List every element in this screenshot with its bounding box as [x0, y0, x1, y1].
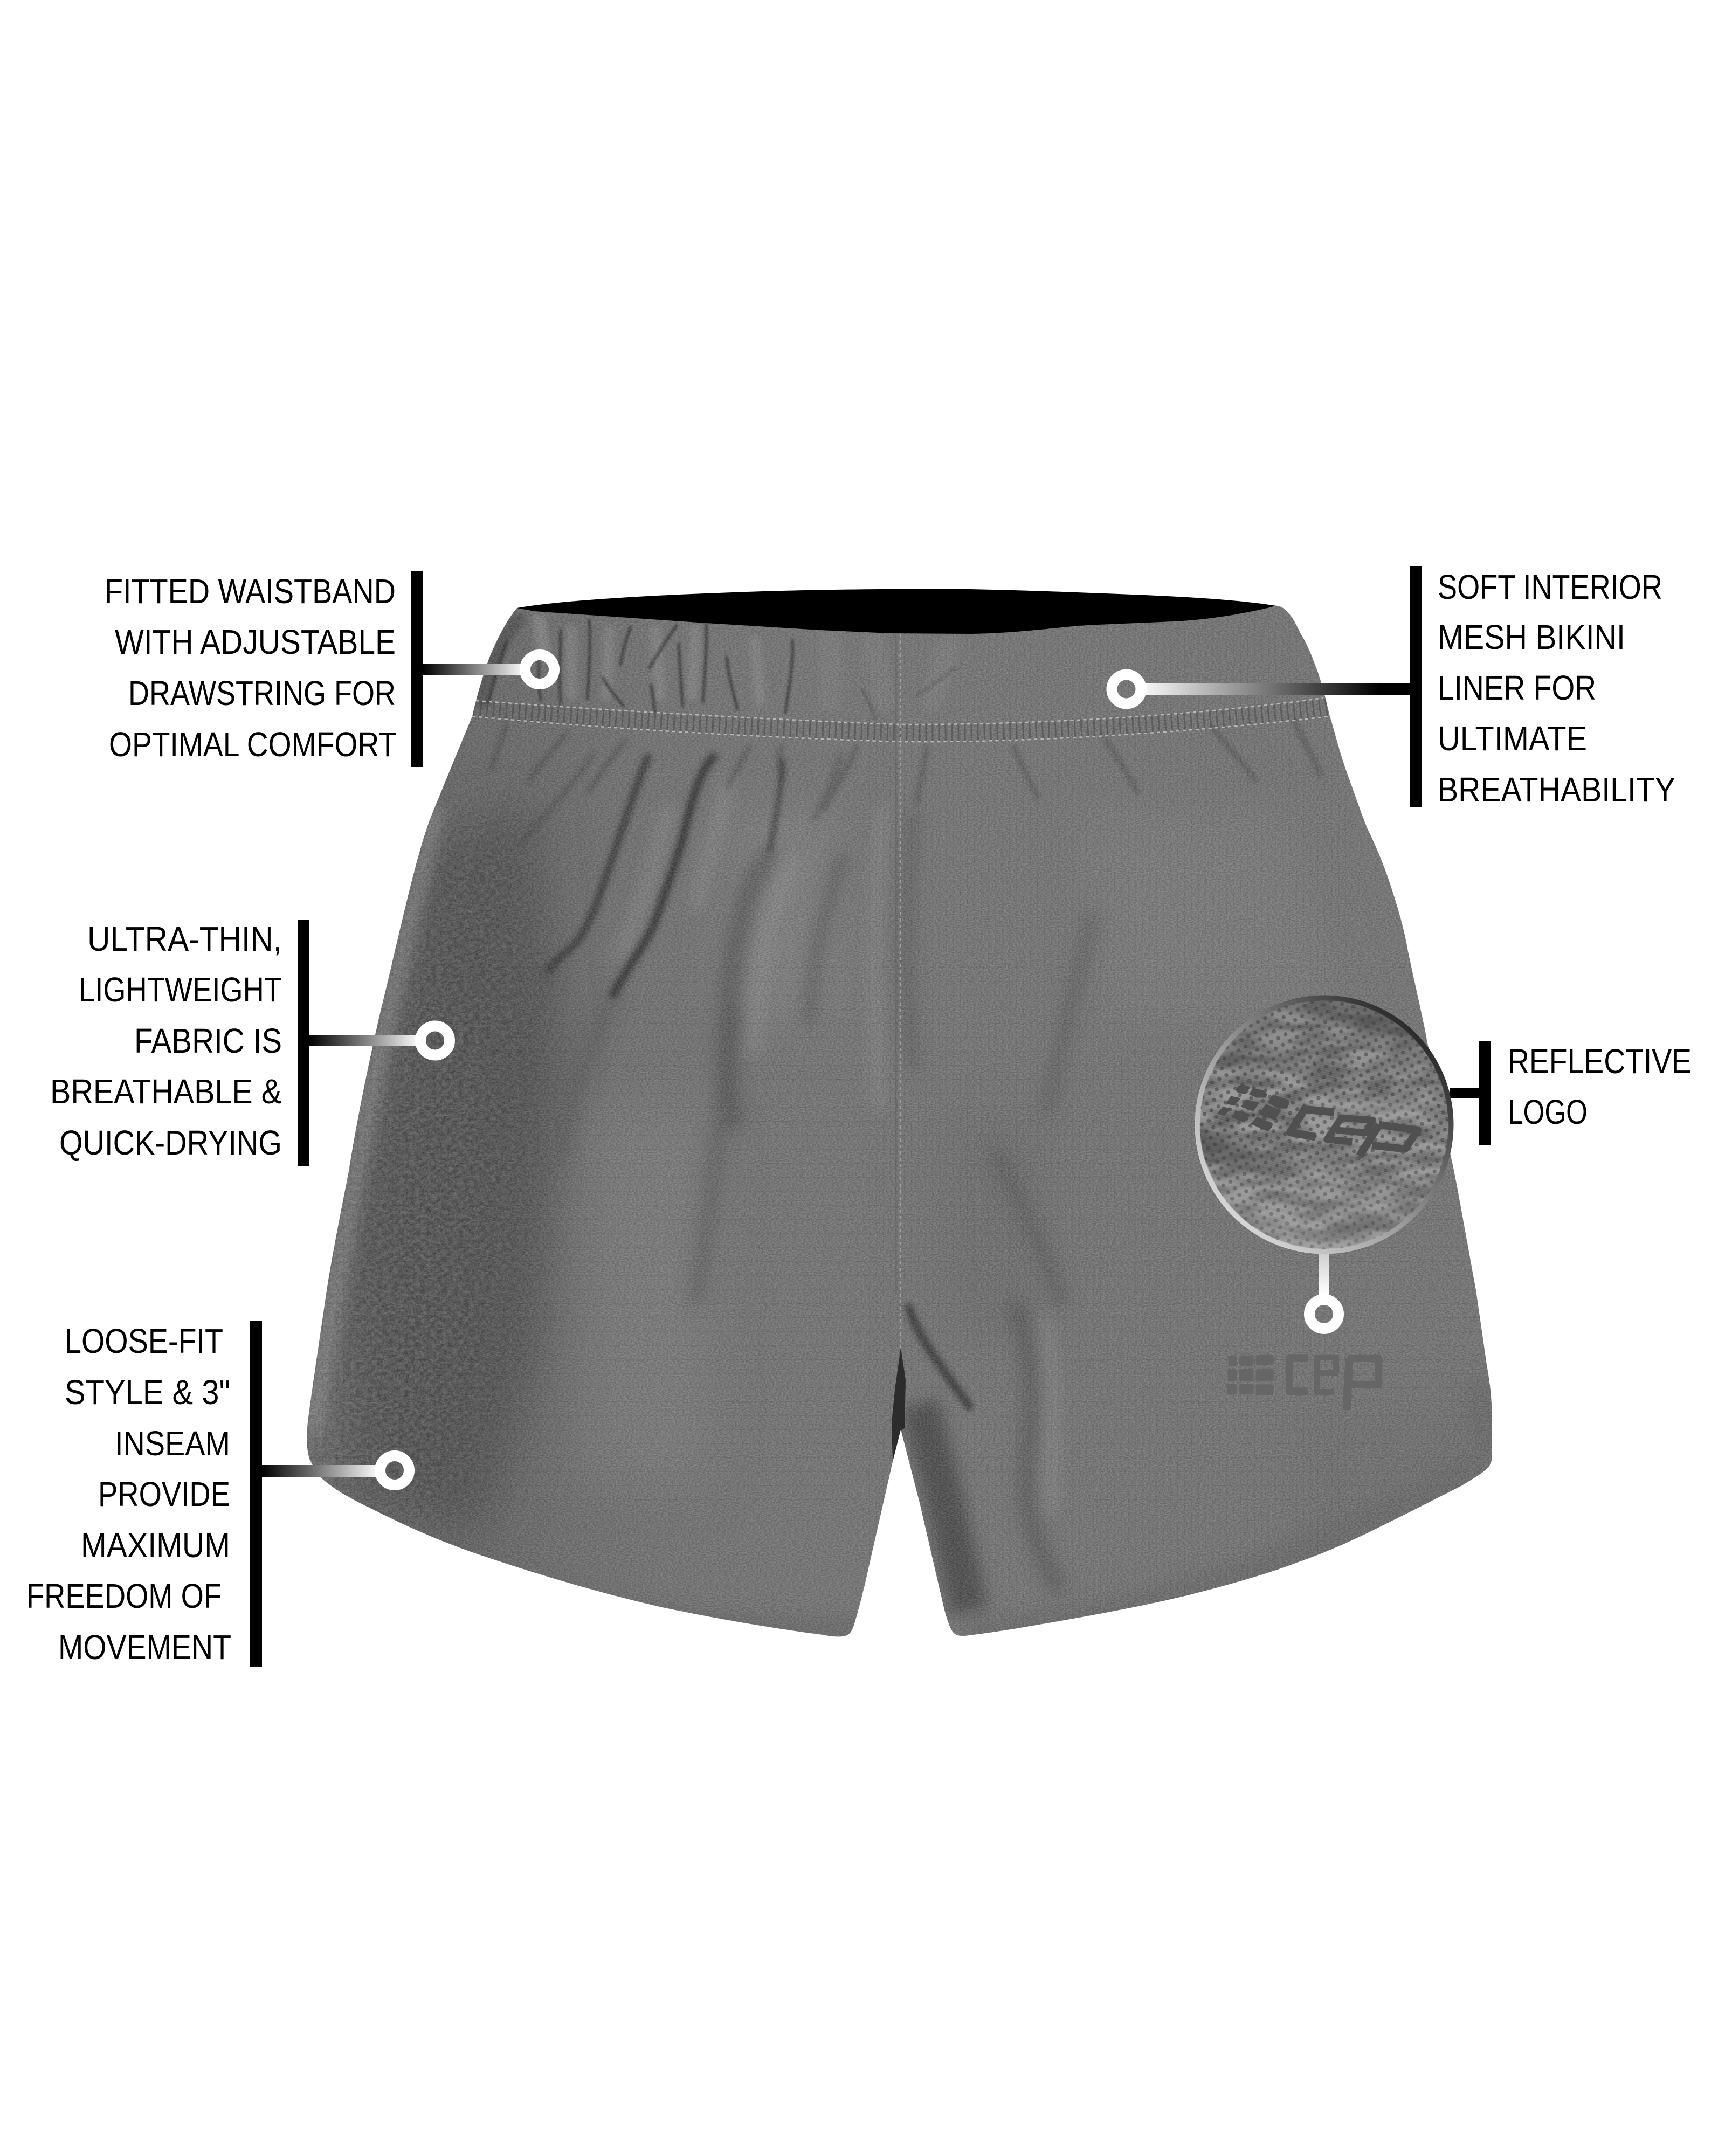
- label text: DRAWSTRING FOR: [128, 674, 396, 713]
- label text: LINER FOR: [1438, 668, 1596, 707]
- gathers below band: [492, 720, 1321, 808]
- label text: LOOSE-FIT: [65, 1322, 223, 1360]
- label text: ULTRA-THIN,: [87, 920, 282, 958]
- label text: QUICK-DRYING: [59, 1123, 282, 1162]
- label text: ULTIMATE: [1438, 719, 1587, 758]
- label bar: [1479, 1041, 1491, 1145]
- centre seam: [900, 634, 901, 1423]
- connector: [262, 1465, 382, 1477]
- label text: [26, 1322, 231, 1667]
- label text: REFLECTIVE: [1508, 1042, 1692, 1081]
- callout: reflective logo magnifier: [1186, 995, 1692, 1329]
- connector: [309, 1035, 422, 1046]
- crotch dark gap: [892, 1348, 906, 1462]
- fabric body: [270, 566, 1509, 1655]
- waistband soft shading: [480, 620, 949, 701]
- label text: MAXIMUM: [81, 1526, 230, 1565]
- shorts garment: [270, 566, 1509, 1655]
- label text: [1438, 568, 1675, 809]
- connector: [423, 664, 526, 675]
- broad side shadow and highlights: [331, 805, 810, 1542]
- label text: BREATHABILITY: [1438, 770, 1675, 809]
- black inner lining at waist: [517, 589, 1276, 636]
- connector: [1137, 683, 1410, 695]
- marker ring: [380, 1456, 409, 1485]
- callout: loose fit: [26, 1321, 409, 1667]
- stem to logo: [1319, 1253, 1329, 1295]
- callout: mesh bikini liner: [1112, 566, 1675, 809]
- hem shading: [314, 808, 1493, 1639]
- label text: MESH BIKINI: [1438, 618, 1625, 657]
- callout: lightweight fabric: [50, 920, 450, 1166]
- label text: [105, 572, 397, 764]
- magnified logo: [1217, 1084, 1418, 1156]
- sharp folds: [523, 755, 969, 1406]
- ripstop and grain texture: [270, 566, 1509, 1655]
- label text: FABRIC IS: [134, 1021, 282, 1060]
- marker ring: [1112, 675, 1141, 704]
- large soft folds: [507, 816, 1092, 1585]
- elastic ruching band: [473, 707, 1327, 733]
- label text: MOVEMENT: [58, 1628, 231, 1667]
- marker ring: [420, 1026, 450, 1055]
- fold highlights: [620, 782, 1052, 1509]
- marker ring: [525, 655, 554, 684]
- marker ring: [1309, 1300, 1338, 1329]
- bar: [411, 571, 423, 767]
- magnified fabric circle: [1186, 995, 1453, 1254]
- label text: [50, 920, 282, 1162]
- label text: SOFT INTERIOR: [1438, 568, 1662, 606]
- connector to label: [1450, 1088, 1480, 1098]
- bar: [1410, 566, 1422, 807]
- waistband gathers: [488, 620, 954, 720]
- label text: OPTIMAL COMFORT: [109, 725, 397, 764]
- label text: BREATHABLE &: [50, 1072, 282, 1111]
- bar: [298, 920, 309, 1166]
- label text: WITH ADJUSTABLE: [115, 623, 396, 661]
- label text: PROVIDE: [98, 1475, 230, 1514]
- label text: FREEDOM OF: [26, 1577, 222, 1615]
- label text: LOGO: [1508, 1093, 1588, 1131]
- logo grid: [1227, 1355, 1274, 1395]
- label text: LIGHTWEIGHT: [79, 970, 282, 1009]
- callout: fitted waistband: [105, 571, 554, 767]
- logo letters c e p: [1289, 1357, 1379, 1410]
- label text: FITTED WAISTBAND: [105, 572, 396, 611]
- waistband stitching: [472, 698, 1330, 742]
- label text: STYLE & 3": [65, 1373, 230, 1412]
- printed logo on leg: [1227, 1355, 1379, 1410]
- bar: [250, 1321, 262, 1667]
- label text: [1508, 1042, 1692, 1131]
- label text: INSEAM: [115, 1424, 230, 1463]
- crinkled left side texture: [270, 755, 701, 1617]
